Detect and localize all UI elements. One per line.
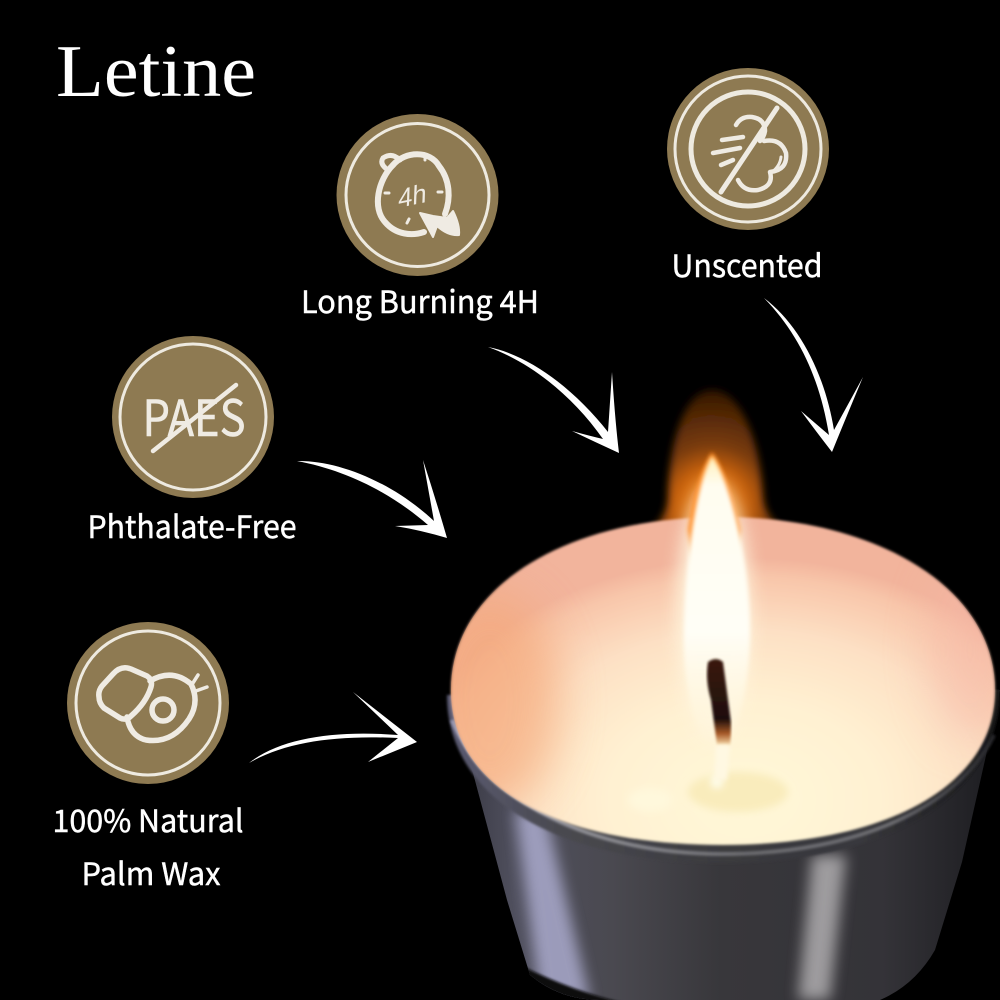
title: Letine bbox=[56, 31, 256, 113]
flame tip edge bbox=[688, 452, 740, 610]
labels: 100% natural palm wax bbox=[52, 796, 244, 894]
icon: palm wax bbox=[67, 622, 229, 784]
labels: 100% natural palm wax: Palm Wax bbox=[82, 849, 220, 894]
arrow: long burning to candle bbox=[488, 347, 619, 453]
wick bbox=[707, 659, 731, 745]
tin body bbox=[440, 680, 1000, 1000]
arrow: phthalate-free to candle bbox=[297, 460, 447, 538]
candle photo bbox=[420, 390, 1000, 1000]
wick base bbox=[714, 745, 730, 780]
icon: unscented bbox=[667, 68, 829, 230]
tin rim bbox=[447, 690, 1000, 863]
icon: PAES free: PAES bbox=[142, 379, 246, 451]
arrow: palm wax to candle bbox=[249, 692, 417, 763]
label: unscented: Unscented bbox=[672, 241, 822, 286]
arrow: unscented to candle bbox=[764, 298, 863, 452]
wax surface bbox=[451, 517, 995, 845]
wax shading bbox=[451, 574, 995, 809]
icon: long burning 4h: 4h bbox=[398, 178, 427, 214]
icon: PAES free bbox=[112, 336, 274, 498]
icon: long burning 4h bbox=[336, 114, 498, 276]
label: phthalate-free: Phthalate-Free bbox=[88, 502, 296, 547]
flame glow bbox=[676, 480, 752, 740]
rim highlight bbox=[452, 720, 994, 854]
melted wax pool bbox=[628, 772, 788, 812]
labels: 100% natural palm wax: 100% Natural bbox=[52, 796, 244, 841]
label: long burning: Long Burning 4H bbox=[301, 277, 539, 322]
flame bbox=[684, 456, 750, 750]
flame halo bbox=[650, 390, 785, 530]
